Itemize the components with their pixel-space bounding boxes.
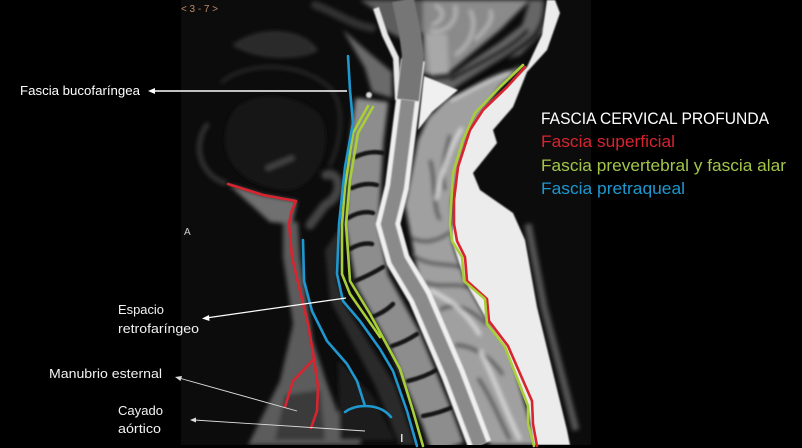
legend: fascia pretraqueal: Fascia pretraqueal bbox=[541, 180, 685, 198]
MRI: face and tongue soft tissue bbox=[199, 5, 372, 225]
label: Espacio retrofaríngeo: Espacio bbox=[118, 303, 164, 317]
label: Cayado aórtico: Cayado bbox=[118, 404, 163, 418]
label: Manubrio esternal: Manubrio esternal bbox=[49, 367, 162, 381]
MRI: posterior neck muscles bbox=[405, 65, 536, 445]
MRI: subcutaneous fat bbox=[452, 0, 576, 445]
legend title: FASCIA CERVICAL PROFUNDA bbox=[541, 110, 769, 128]
MRI: vertebral column bbox=[348, 92, 455, 448]
MRI: brain, cerebellum and brainstem bbox=[343, 0, 548, 122]
fascia superficial lines (red) bbox=[228, 67, 537, 446]
MRI image: sagittal cervical spine bbox=[181, 0, 591, 448]
arrow: Manubrio esternal bbox=[175, 376, 297, 411]
MRI: chin and anterior neck tissue bbox=[228, 184, 415, 445]
label: Espacio retrofaríngeo: retrofaríngeo bbox=[118, 322, 199, 336]
MRI: spinal cord and cerebrospinal fluid bbox=[376, 0, 480, 445]
arrow: Fascia bucofaríngea bbox=[148, 88, 347, 94]
legend: fascia prevertebral y fascia alar: Fascia prevertebral y fascia alar bbox=[541, 157, 787, 175]
MRI series marker: <3-7> bbox=[181, 4, 218, 15]
legend bbox=[541, 110, 787, 198]
label: Fascia bucofaríngea: Fascia bucofaríngea bbox=[20, 84, 140, 98]
fascia pretraqueal lines (blue) bbox=[303, 56, 417, 446]
legend: fascia superficial: Fascia superficial bbox=[541, 133, 675, 151]
arrow: Espacio retrofaríngeo bbox=[202, 298, 346, 321]
arrow: Cayado aórtico bbox=[190, 418, 365, 431]
tick mark bbox=[401, 434, 402, 442]
MRI orientation letter: A bbox=[184, 227, 191, 238]
fascia prevertebral and alar lines (green) bbox=[342, 65, 534, 446]
label: Cayado aórtico: aórtico bbox=[118, 422, 161, 436]
